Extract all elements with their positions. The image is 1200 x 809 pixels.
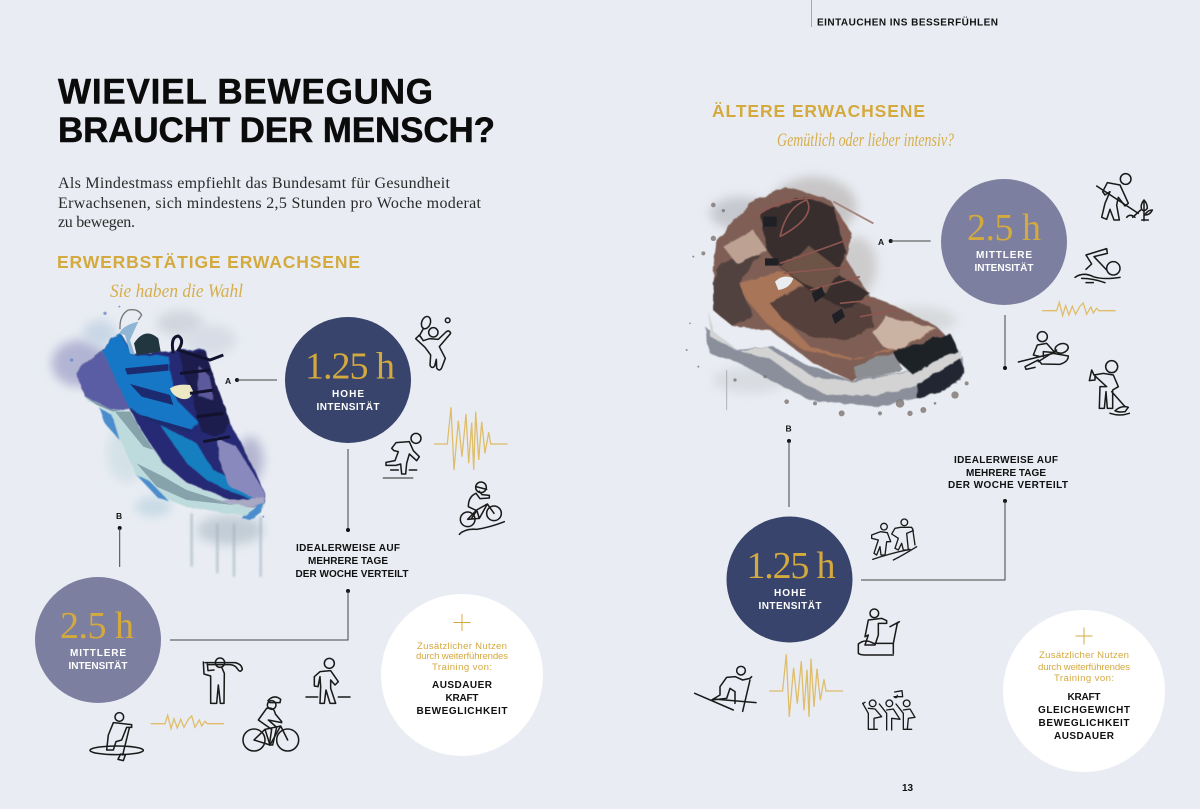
connector B: moderate intensity bbox=[116, 511, 122, 567]
note: spread across days bbox=[296, 543, 408, 580]
page number: 13 bbox=[902, 783, 914, 794]
circle: extra benefits older adults: AUSDAUER bbox=[1054, 731, 1115, 742]
connector: moderate intensity to note bbox=[1003, 315, 1007, 370]
note: spread across days: MEHRERE TAGE bbox=[308, 556, 388, 567]
heading: older adults: ÄLTERE ERWACHSENE bbox=[712, 101, 925, 121]
icon: gardening bbox=[1097, 174, 1152, 221]
icon: elliptical trainer bbox=[858, 609, 899, 655]
connector: note to high intensity bbox=[861, 499, 1007, 580]
illustration: blue running shoe bbox=[52, 306, 267, 577]
circle: extra benefits working adults: Zusätzlicher Nutzen bbox=[417, 641, 507, 652]
panel: working adults bbox=[35, 252, 543, 761]
circle: high intensity 1.25 h bbox=[726, 516, 852, 642]
waveform: high intensity bbox=[434, 407, 508, 470]
connector B: moderate intensity: B bbox=[116, 511, 122, 521]
icon: stand-up paddling bbox=[90, 713, 143, 761]
circle: high intensity 1.25 h: HOHE bbox=[332, 389, 364, 400]
intro text bbox=[58, 175, 482, 231]
icon: walking bbox=[306, 658, 350, 703]
connector A: moderate intensity bbox=[878, 237, 931, 247]
connector B: high intensity bbox=[786, 424, 792, 507]
connector A: high intensity bbox=[225, 376, 277, 386]
note: spread across days: MEHRERE TAGE bbox=[966, 468, 1046, 479]
heading: working adults: ERWERBSTÄTIGE ERWACHSENE bbox=[57, 252, 360, 272]
circle: high intensity 1.25 h bbox=[285, 317, 411, 443]
circle: moderate intensity 2.5 h: 2.5 h bbox=[60, 605, 134, 647]
circle: extra benefits older adults: durch weiterführendes bbox=[1038, 662, 1130, 673]
connector A: high intensity: A bbox=[225, 376, 231, 386]
circle: moderate intensity 2.5 h: 2.5 h bbox=[967, 207, 1041, 249]
circle: extra benefits older adults: Zusätzlicher Nutzen bbox=[1039, 650, 1129, 661]
circle: extra benefits older adults: Training von: bbox=[1054, 673, 1114, 684]
circle: extra benefits working adults: BEWEGLICHKEIT bbox=[416, 706, 508, 717]
title: BRAUCHT DER MENSCH? bbox=[58, 111, 495, 150]
icon: swimming bbox=[1075, 249, 1120, 283]
icon: cross-country skiing bbox=[695, 666, 756, 711]
panel: older adults bbox=[686, 101, 1165, 772]
circle: moderate intensity 2.5 h: INTENSITÄT bbox=[68, 659, 128, 672]
circle: extra benefits working adults bbox=[381, 594, 543, 756]
note: spread across days: DER WOCHE VERTEILT bbox=[948, 480, 1068, 491]
circle: extra benefits older adults: GLEICHGEWICHT bbox=[1038, 705, 1130, 716]
circle: extra benefits working adults: Training von: bbox=[432, 662, 492, 673]
connector A: moderate intensity: A bbox=[878, 237, 884, 247]
script subtitle: older adults: Gemütlich oder lieber intensiv? bbox=[777, 130, 954, 151]
icon: kayaking bbox=[1018, 332, 1069, 369]
title: WIEVIEL BEWEGUNG bbox=[58, 72, 433, 112]
icon: running bbox=[383, 433, 421, 478]
circle: extra benefits older adults: BEWEGLICHKEIT bbox=[1038, 718, 1130, 729]
icon: tennis bbox=[416, 315, 451, 370]
icon: golf bbox=[203, 658, 242, 703]
script subtitle: working adults: Sie haben die Wahl bbox=[110, 281, 243, 302]
icon: sweeping bbox=[1089, 361, 1129, 415]
illustration: brown hiking boot bbox=[686, 177, 969, 416]
circle: high intensity 1.25 h: HOHE bbox=[774, 588, 806, 599]
circle: extra benefits working adults: KRAFT bbox=[446, 693, 478, 704]
note: spread across days: IDEALERWEISE AUF bbox=[296, 543, 400, 554]
circle: moderate intensity 2.5 h: MITTLERE bbox=[976, 250, 1032, 261]
connector: high intensity to note bbox=[346, 449, 350, 532]
title bbox=[58, 72, 495, 150]
note: spread across days: DER WOCHE VERTEILT bbox=[296, 569, 408, 580]
circle: extra benefits older adults bbox=[1003, 610, 1165, 772]
circle: moderate intensity 2.5 h: INTENSITÄT bbox=[974, 261, 1034, 274]
intro text: Erwachsenen, sich mindestens 2,5 Stunden pro Woche moderat bbox=[58, 195, 482, 212]
circle: high intensity 1.25 h: INTENSITÄT bbox=[758, 599, 822, 612]
intro text: Als Mindestmass empfiehlt das Bundesamt für Gesundheit bbox=[58, 175, 451, 192]
note: spread across days bbox=[948, 455, 1068, 491]
icon: mountain bike bbox=[459, 482, 504, 534]
icon: dancing group bbox=[863, 691, 915, 730]
intro text: zu bewegen. bbox=[58, 214, 135, 231]
circle: extra benefits working adults: durch weiterführendes bbox=[416, 651, 508, 662]
icon: cycling bbox=[243, 697, 299, 751]
running header: EINTAUCHEN INS BESSERFÜHLEN bbox=[817, 16, 998, 28]
connector B: high intensity: B bbox=[786, 424, 792, 434]
circle: moderate intensity 2.5 h bbox=[941, 179, 1067, 305]
circle: high intensity 1.25 h: 1.25 h bbox=[305, 346, 395, 388]
connector: note to moderate intensity bbox=[170, 589, 350, 640]
circle: extra benefits older adults: KRAFT bbox=[1068, 692, 1100, 703]
waveform: moderate intensity bbox=[151, 715, 224, 729]
waveform: high intensity bbox=[769, 654, 843, 717]
circle: high intensity 1.25 h: 1.25 h bbox=[746, 545, 836, 587]
circle: moderate intensity 2.5 h: MITTLERE bbox=[70, 648, 126, 659]
circle: high intensity 1.25 h: INTENSITÄT bbox=[316, 400, 380, 413]
icon: hiking bbox=[872, 519, 917, 560]
circle: moderate intensity 2.5 h bbox=[35, 577, 161, 703]
circle: extra benefits working adults: AUSDAUER bbox=[432, 680, 493, 691]
waveform: moderate intensity bbox=[1042, 302, 1116, 316]
note: spread across days: IDEALERWEISE AUF bbox=[954, 455, 1058, 466]
